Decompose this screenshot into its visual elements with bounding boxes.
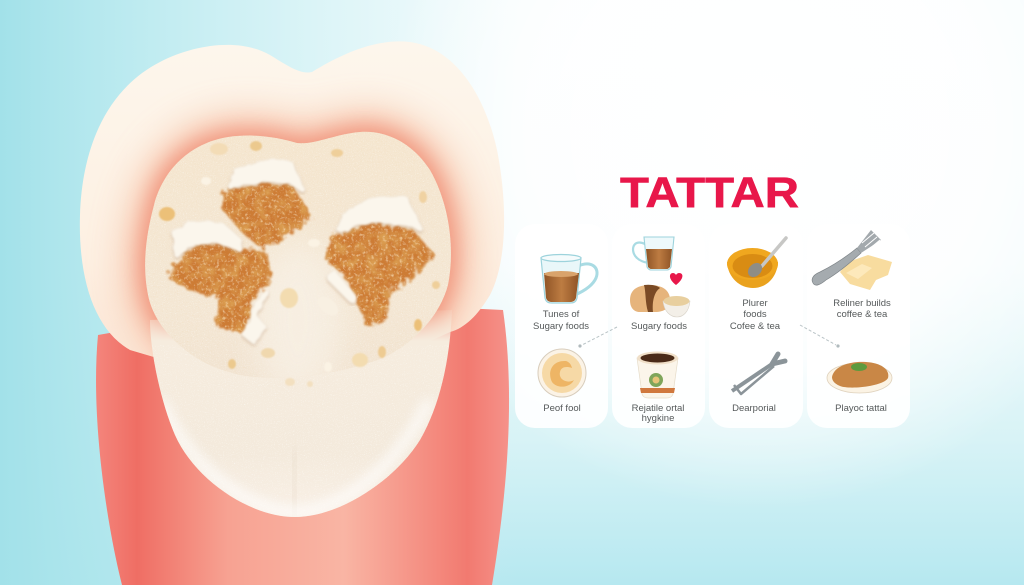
icon: heart: [670, 273, 682, 285]
label: Dearporial: [732, 403, 776, 414]
label: Sugary foods: [533, 321, 589, 332]
label: Plurer: [742, 298, 768, 309]
label: Cofee & tea: [730, 321, 781, 332]
icon: wrench tool: [732, 354, 785, 394]
panel: card 3: [709, 224, 803, 428]
label: Playoc tattal: [835, 403, 887, 414]
title: TATTAR: [620, 170, 799, 217]
icon: yellow plate: [538, 349, 586, 397]
panel: card 1: [515, 224, 608, 428]
tartar deposit: top: [223, 161, 312, 250]
label: Tunes of: [543, 309, 580, 320]
panel: card 2: [612, 224, 705, 428]
tartar deposit: left: [167, 223, 272, 340]
icon: bowl: [663, 296, 690, 317]
icon: orange bowl and spoon: [727, 238, 786, 288]
icon: butter: [840, 255, 892, 290]
panel: card 4: [807, 224, 910, 428]
label: hygkine: [642, 413, 674, 424]
arrow: dashed left connector: [578, 327, 617, 348]
label: foods: [743, 309, 767, 320]
label: Sugary foods: [631, 321, 687, 332]
icon: brush fork: [812, 230, 881, 285]
tartar plateau surface: [145, 132, 451, 378]
label: coffee & tea: [837, 309, 888, 320]
arrow: dashed right connector: [800, 325, 840, 348]
loose tartar crumbs: [159, 141, 440, 387]
label: Peof fool: [543, 403, 581, 414]
icon: paper cup: [637, 352, 678, 398]
icon: food plate: [827, 362, 892, 393]
tooth crown with red inner halo: [80, 42, 504, 357]
icon: bread: [630, 285, 670, 312]
gum: [96, 300, 509, 585]
tartar deposit: right: [327, 198, 433, 327]
label: Rejatile ortal: [632, 403, 684, 414]
icon: coffee mug: [541, 254, 597, 303]
label: Reliner builds: [833, 298, 891, 309]
icon: small coffee glass: [633, 237, 674, 270]
lower tooth body: [150, 310, 452, 517]
